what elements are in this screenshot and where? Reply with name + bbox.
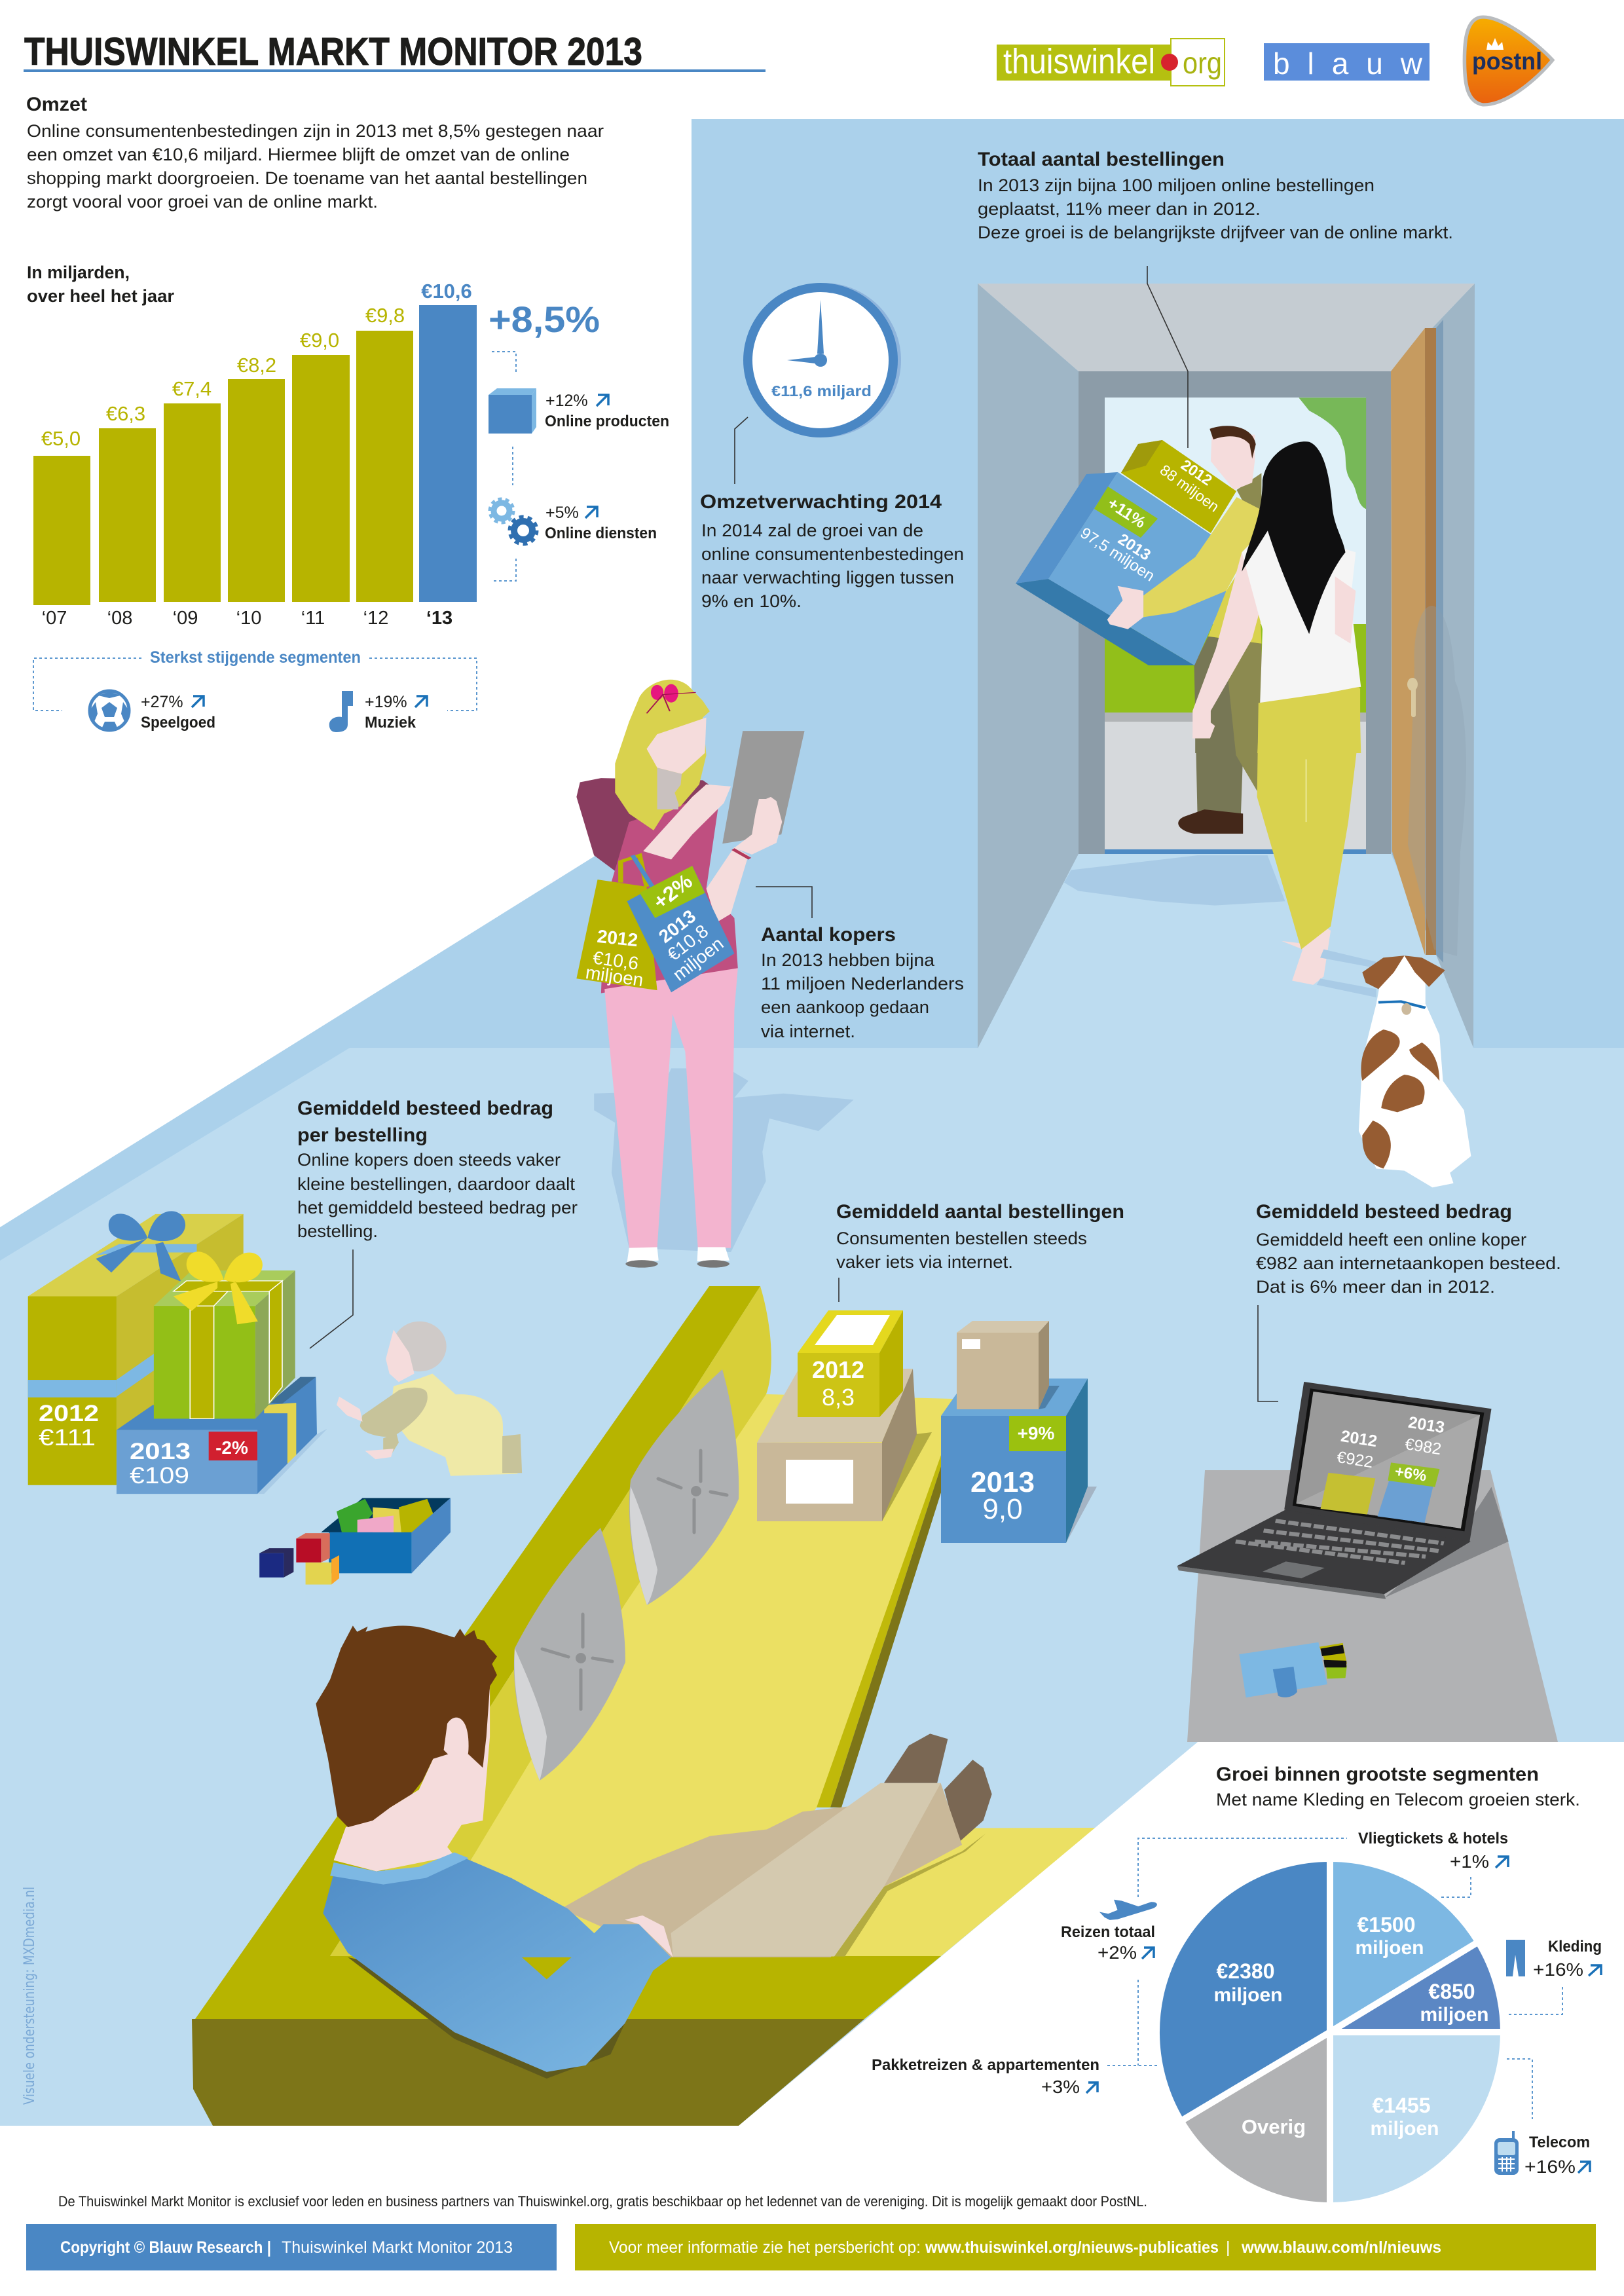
text: totaal aantal bestellingen: Deze groei is de belangrijkste drijfveer van de online markt. (978, 223, 1453, 242)
text: totaal aantal bestellingen: geplaatst, 11% meer dan in 2012. (978, 199, 1261, 219)
text: gemiddeld aantal bestellingen: Gemiddeld aantal bestellingen (836, 1201, 1124, 1223)
footer bar: meer informatie: Voor meer informatie zie het persbericht op: (609, 2238, 921, 2257)
corridor with open door (978, 284, 1475, 1048)
label: pakketreizen & appartementen: +3% (1041, 2077, 1080, 2097)
bar chart: omzet in miljarden: €6,3 (106, 402, 145, 425)
text: aantal kopers: Aantal kopers (761, 924, 896, 946)
gift 2012 (28, 1214, 244, 1296)
pie chart: segmenten: €850 (1428, 1980, 1475, 2003)
heading: groei binnen grootste segmenten: Groei binnen grootste segmenten (1216, 1764, 1539, 1785)
logo: blauw: b l a u w (1273, 46, 1423, 81)
icon: telephone (1494, 2131, 1519, 2175)
pie chart: segmenten: miljoen (1355, 1937, 1424, 1959)
boxes 2012 / 2013: +9% (1018, 1423, 1055, 1443)
label: vliegtickets & hotels (1358, 1830, 1508, 1872)
text: omzetverwachting 2014: 9% en 10%. (701, 591, 802, 611)
label: kleding: Kleding (1548, 1938, 1602, 1955)
label: kleding (1533, 1938, 1602, 1980)
chart caption: over heel het jaar (27, 286, 174, 306)
bar chart: omzet in miljarden: €5,0 (41, 427, 81, 450)
laptop (1177, 1566, 1386, 1599)
text: aantal kopers: 11 miljoen Nederlanders (761, 974, 964, 993)
text: Omzet: shopping markt doorgroeien. De toename van het aantal bestellingen (27, 168, 587, 188)
speelgoed: Speelgoed (141, 714, 215, 731)
bow (651, 684, 678, 703)
online diensten (545, 504, 657, 542)
footer bar: meer informatie: | (1226, 2238, 1230, 2257)
label: vliegtickets & hotels: +1% (1450, 1851, 1489, 1872)
white corner panel (0, 1742, 1624, 2296)
woman with tablet: +2% (649, 869, 697, 914)
online diensten: +5% (545, 504, 579, 522)
text: totaal aantal bestellingen (978, 149, 1453, 242)
parcel 2012 (1121, 440, 1236, 533)
woman with tablet: 2013 (655, 906, 699, 947)
text: Omzet (27, 121, 604, 212)
logo: thuiswinkel.org: org (1183, 46, 1222, 80)
text: aantal kopers (761, 924, 964, 1041)
pie chart: segmenten: miljoen (1213, 1984, 1283, 2006)
blue bag (633, 855, 654, 889)
pie chart: segmenten (1156, 1859, 1504, 2206)
speelgoed (141, 693, 215, 731)
muziek: Muziek (365, 714, 416, 731)
gift green (154, 1270, 295, 1306)
logo: thuiswinkel.org: thuiswinkel (1003, 42, 1155, 81)
text: gemiddeld besteed bedrag: €982 aan internetaankopen besteed. (1256, 1253, 1561, 1273)
text: gemiddeld besteed bedrag per bestelling: per bestelling (297, 1124, 428, 1146)
parcel 2013: 2013 (1115, 530, 1154, 565)
muziek: +19% (365, 693, 407, 711)
wallet (1320, 1643, 1347, 1667)
footer bar: copyright (26, 2224, 557, 2270)
woman at door (1192, 441, 1361, 985)
bar chart: omzet in miljarden: €9,0 (300, 329, 339, 352)
pie chart: segmenten: miljoen (1370, 2118, 1439, 2139)
logo: postnl (1464, 17, 1553, 105)
back wall (0, 119, 1624, 1261)
icon: trousers (1506, 1940, 1525, 1976)
boxes 2012 / 2013 (757, 1310, 1097, 1543)
boxes 2012 / 2013: 9,0 (982, 1493, 1023, 1525)
bag labels: 2012 (596, 926, 639, 950)
text: gemiddeld besteed bedrag per bestelling: bestelling. (297, 1221, 378, 1241)
parcel 2013 (1016, 472, 1227, 665)
jacket (576, 778, 720, 880)
boxes 2012 / 2013: 2013 (970, 1466, 1035, 1498)
text: aantal kopers: In 2013 hebben bijna (761, 950, 935, 970)
table, laptop, wallet (1177, 1382, 1558, 1742)
floor (0, 1048, 1624, 2126)
title: THUISWINKEL MARKT MONITOR 2013 (24, 30, 642, 73)
box values: 2012 (812, 1356, 864, 1383)
online diensten: Online diensten (545, 525, 657, 542)
text: gemiddeld besteed bedrag per bestelling: kleine bestellingen, daardoor daalt (297, 1174, 576, 1194)
hair (615, 680, 710, 830)
text: gemiddeld besteed bedrag per bestelling (297, 1098, 578, 1241)
text: gemiddeld aantal bestellingen (836, 1201, 1124, 1272)
icon: gears (490, 499, 537, 544)
arms (643, 785, 731, 860)
text: gemiddeld besteed bedrag (1256, 1201, 1561, 1297)
text: gemiddeld aantal bestellingen: vaker iets via internet. (836, 1252, 1013, 1272)
online producten: +12% (545, 392, 588, 410)
pie chart: segmenten: €1500 (1357, 1913, 1415, 1936)
parcel 2013: 97,5 miljoen (1077, 524, 1158, 585)
label: pakketreizen & appartementen (872, 2056, 1099, 2097)
label: reizen totaal: Reizen totaal (1061, 1923, 1155, 1941)
chart caption (27, 263, 174, 306)
bar chart: omzet in miljarden: ‘07 (42, 608, 67, 629)
woman with tablet: miljoen (669, 933, 728, 985)
bar chart: omzet in miljarden: ‘13 (426, 608, 452, 629)
label: pakketreizen & appartementen: Pakketreizen & appartementen (872, 2056, 1099, 2074)
woman with tablet: €10,8 (663, 921, 712, 965)
clock: omzetverwachting (743, 283, 901, 437)
chart caption: In miljarden, (27, 263, 130, 282)
text: gemiddeld besteed bedrag: Gemiddeld besteed bedrag (1256, 1201, 1512, 1223)
parcel growth badge (1094, 487, 1158, 538)
footer bar: meer informatie: www.thuiswinkel.org/nieuws-publicaties (925, 2238, 1219, 2257)
bar chart: omzet in miljarden: ‘11 (301, 608, 325, 629)
table, laptop, wallet: 2012 (1340, 1427, 1378, 1451)
red badge (209, 1432, 257, 1460)
hand (625, 1916, 673, 1957)
gift blue base 2013 (117, 1377, 317, 1494)
text: omzetverwachting 2014: In 2014 zal de groei van de (701, 521, 923, 540)
pie chart: segmenten: Overig (1242, 2115, 1306, 2138)
pie chart: segmenten: €2380 (1217, 1959, 1274, 1983)
trousers and shoes (884, 1733, 948, 1783)
icon: plane (1099, 1900, 1157, 1920)
tablet (722, 731, 805, 843)
text: totaal aantal bestellingen: Totaal aantal bestellingen (978, 149, 1225, 170)
shoes (627, 1247, 659, 1263)
heading: Omzet: Omzet (26, 94, 87, 115)
hair (316, 1625, 497, 1827)
logo: thuiswinkel.org (997, 39, 1225, 86)
text: Omzet: Online consumentenbestedingen zijn in 2013 met 8,5% gestegen naar (27, 121, 604, 141)
footer bar: meer informatie: www.blauw.com/nl/nieuws (1241, 2238, 1441, 2257)
heading: groei binnen grootste segmenten: Met name Kleding en Telecom groeien sterk. (1216, 1790, 1580, 1809)
clock: omzetverwachting: €11,6 miljard (771, 382, 872, 399)
label: reizen totaal: +2% (1098, 1942, 1137, 1963)
table, laptop, wallet: +6% (1393, 1462, 1428, 1485)
bar chart: omzet in miljarden: ‘12 (363, 608, 388, 629)
gifts (28, 1211, 327, 1494)
text: totaal aantal bestellingen: In 2013 zijn bijna 100 miljoen online bestellingen (978, 176, 1375, 195)
text: Omzet: een omzet van €10,6 miljard. Hiermee blijft de omzet van de online (27, 145, 570, 164)
sweater (323, 1854, 671, 2072)
gift labels: 2012 (39, 1401, 99, 1426)
pillow left (514, 1528, 625, 1781)
bar chart: omzet in miljarden: ‘08 (107, 608, 132, 629)
torso shadow (348, 1957, 625, 2079)
parcel 2013: +11% (1104, 494, 1149, 532)
gift labels (39, 1401, 248, 1489)
logo: postnl: postnl (1472, 48, 1542, 75)
speelgoed: +27% (141, 693, 183, 711)
toys (259, 1498, 451, 1585)
courier (1195, 426, 1261, 753)
text: gemiddeld besteed bedrag per bestelling: Gemiddeld besteed bedrag (297, 1098, 553, 1119)
woman with tablet: miljoen (584, 962, 644, 990)
label: vliegtickets & hotels: Vliegtickets & hotels (1358, 1830, 1508, 1847)
box 2013 (1066, 1487, 1097, 1543)
bar chart: omzet in miljarden: €8,2 (237, 354, 276, 377)
parcel 2012: 88 miljoen (1157, 461, 1223, 515)
pie chart: segmenten: €1455 (1373, 2094, 1430, 2117)
boxes 2012 / 2013: 8,3 (822, 1384, 855, 1411)
text: gemiddeld besteed bedrag: Dat is 6% meer dan in 2012. (1256, 1277, 1495, 1297)
icon: music note (329, 691, 353, 732)
baby (337, 1322, 522, 1476)
figures: courier, parcels and woman at door (1016, 426, 1361, 985)
bar chart: omzet in miljarden: €10,6 (421, 280, 472, 303)
shadow (594, 1068, 854, 1252)
text: gemiddeld aantal bestellingen: Consumenten bestellen steeds (836, 1229, 1087, 1248)
man on sofa (316, 1625, 992, 2079)
olive bag (621, 855, 646, 887)
dog (1317, 950, 1471, 1187)
label: telecom: Telecom (1529, 2134, 1590, 2151)
text: omzetverwachting 2014: naar verwachting liggen tussen (701, 568, 954, 587)
gift labels: 2013 (130, 1439, 191, 1464)
panel: sterkst stijgende segmenten: Sterkst stijgende segmenten (150, 648, 361, 667)
text: gemiddeld besteed bedrag per bestelling: het gemiddeld besteed bedrag per (297, 1198, 578, 1217)
table, laptop, wallet: €982 (1404, 1435, 1443, 1458)
table, laptop, wallet: €922 (1336, 1448, 1375, 1472)
label: telecom (1524, 2134, 1590, 2177)
laptop screen labels: 2013 (1407, 1413, 1446, 1437)
label: reizen totaal (1061, 1923, 1155, 1963)
courier arm (1107, 497, 1261, 644)
pink trousers (604, 968, 738, 1248)
panel: sterkst stijgende segmenten (33, 648, 477, 732)
box 2012 (798, 1310, 903, 1353)
gift labels: €111 (39, 1425, 96, 1451)
text: omzetverwachting 2014: online consumentenbestedingen (701, 544, 964, 564)
pie chart: segmenten: miljoen (1420, 2004, 1489, 2026)
blue bow (96, 1211, 185, 1282)
bar chart: omzet in miljarden: €7,4 (172, 377, 212, 400)
sofa (192, 1286, 1096, 2126)
top (601, 792, 738, 993)
footer bar: meer informatie (575, 2224, 1596, 2270)
footer disclaimer: De Thuiswinkel Markt Monitor is exclusief voor leden en business partners van Thuiswinkel.org, gratis beschikbaar op het ledennet van de vereniging. Dit is mogelijk gemaakt door PostNL. (58, 2193, 1147, 2210)
footer bar: copyright: Copyright © Blauw Research | (60, 2238, 271, 2257)
footer bar: copyright: Thuiswinkel Markt Monitor 2013 (282, 2238, 513, 2257)
woman with tablet: €10,6 (591, 947, 640, 974)
neck (334, 1688, 490, 1871)
muziek (365, 693, 427, 731)
yellow bow (174, 1251, 263, 1324)
text: gemiddeld besteed bedrag: Gemiddeld heeft een online koper (1256, 1230, 1526, 1250)
growth figure +8,5%: +8,5% (489, 299, 600, 340)
gift labels: €109 (130, 1463, 189, 1489)
bar chart: omzet in miljarden (27, 263, 477, 629)
label: kleding: +16% (1533, 1959, 1583, 1980)
bar chart: omzet in miljarden: ‘09 (173, 608, 198, 629)
text: aantal kopers: via internet. (761, 1022, 855, 1041)
bar chart: omzet in miljarden: €9,8 (365, 304, 405, 327)
text: gemiddeld besteed bedrag per bestelling: Online kopers doen steeds vaker (297, 1150, 561, 1170)
bar chart: omzet in miljarden: ‘10 (236, 608, 261, 629)
icon: football (90, 691, 129, 731)
online producten: Online producten (545, 413, 669, 430)
woman with tablet (576, 680, 854, 1268)
text: Omzet: zorgt vooral voor groei van de online markt. (27, 192, 378, 212)
parcel 2012 label: 2012 (1178, 456, 1215, 489)
credit: vertical text: Visuele ondersteuning: MXDmedia.nl (22, 1887, 38, 2105)
shadow: couple on floor (1064, 855, 1285, 906)
heading: groei binnen grootste segmenten (1216, 1764, 1580, 1809)
online producten (545, 392, 669, 430)
text: omzetverwachting 2014: Omzetverwachting 2014 (700, 491, 942, 513)
icon: product box (489, 388, 536, 434)
text: omzetverwachting 2014 (700, 491, 964, 611)
label: telecom: +16% (1524, 2157, 1576, 2177)
pillow right (629, 1369, 739, 1605)
text: aantal kopers: een aankoop gedaan (761, 997, 929, 1017)
gift labels: -2% (215, 1437, 248, 1458)
